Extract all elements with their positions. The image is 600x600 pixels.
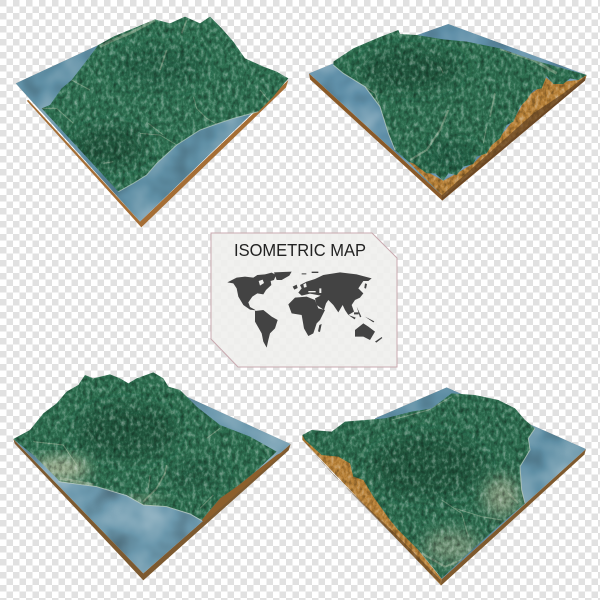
inland seas bbox=[303, 283, 321, 293]
forested land bbox=[14, 372, 276, 520]
coastline foam bbox=[118, 112, 258, 192]
forested land bbox=[42, 16, 288, 192]
terrain block: bottom left bbox=[13, 372, 291, 580]
hudson bay bbox=[259, 280, 264, 286]
africa bbox=[288, 297, 325, 336]
sea bbox=[13, 397, 291, 573]
card panel bbox=[211, 233, 397, 367]
terrain block: top right bbox=[309, 24, 587, 201]
forested land bbox=[302, 394, 535, 578]
world map silhouette bbox=[227, 272, 382, 348]
islands bbox=[293, 272, 382, 343]
greenland bbox=[274, 272, 292, 280]
forested land bbox=[333, 30, 586, 180]
small rock cliff bbox=[202, 450, 287, 522]
sea bbox=[375, 387, 586, 580]
coastline foam bbox=[333, 65, 395, 150]
sea bbox=[16, 19, 288, 222]
block side wall bbox=[13, 439, 291, 580]
card title: ISOMETRIC MAP bbox=[234, 240, 366, 260]
coastline foam bbox=[520, 428, 535, 503]
block side wall bbox=[309, 73, 587, 201]
south america bbox=[255, 310, 278, 348]
exposed rock cliff bbox=[408, 75, 587, 198]
north america bbox=[227, 273, 276, 310]
coastline foam bbox=[58, 482, 202, 521]
dark cliff base bbox=[442, 77, 585, 201]
exposed rock cliff bbox=[302, 435, 442, 585]
terrain block: top left bbox=[16, 16, 288, 228]
eurasia bbox=[298, 272, 372, 315]
dark cliff base bbox=[305, 443, 441, 584]
australia bbox=[355, 323, 375, 340]
map card bbox=[211, 233, 397, 367]
block side wall bbox=[438, 449, 586, 586]
sea bbox=[309, 24, 587, 195]
block side wall bbox=[27, 80, 288, 227]
terrain block: bottom right bbox=[302, 387, 586, 586]
